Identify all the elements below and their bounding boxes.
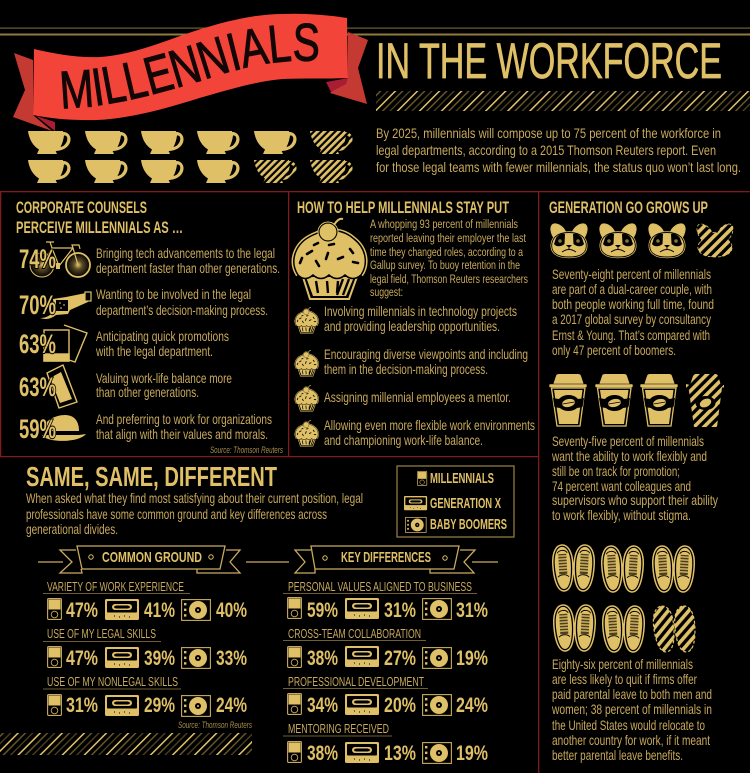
row: use of my nonlegal skills: 31% [66, 694, 98, 717]
panel: generation go grows up [549, 199, 733, 763]
row: professional development: 34% [307, 694, 338, 717]
intro paragraph: suggest: [370, 285, 403, 299]
stat: 59%: 59% [19, 414, 56, 444]
row: professional development: PROFESSIONAL DEVELOPMENT [288, 674, 424, 689]
suggestion 4: and championing work-life balance. [324, 432, 483, 448]
intro text: generational divides. [26, 521, 118, 537]
text: promotions: Anticipating quick promotions [96, 328, 229, 344]
heading [16, 199, 183, 237]
icon: large cupcake [294, 219, 365, 299]
row: personal values: 31% [456, 599, 488, 622]
row: cross-team collaboration: 38% [307, 647, 338, 670]
icon row: coffee to-go cups [549, 374, 724, 427]
stat: 74%: 74% [19, 244, 56, 274]
row: personal values: 59% [307, 599, 338, 622]
text: parental leave: are less likely to quit if firms offer [552, 671, 697, 687]
suggestion 2: them in the decision-making process. [324, 361, 488, 377]
row: variety of work experience [43, 579, 247, 622]
ribbon: key differences [295, 546, 498, 573]
icon: phone [47, 365, 77, 408]
row: cross-team collaboration: 19% [456, 647, 488, 670]
legend [397, 466, 514, 537]
row: use of my nonlegal skills: 24% [216, 694, 247, 717]
banner right tail [330, 32, 368, 104]
icon: small cupcake 4 [295, 421, 318, 446]
icon: small cupcake 3 [295, 386, 318, 411]
hatched band: header [376, 91, 750, 111]
row: variety of work experience: 47% [66, 599, 98, 622]
row: variety of work experience: 41% [144, 599, 175, 622]
suggestion 2 [324, 346, 528, 377]
suggestion 4: Allowing even more flexible work environments [324, 417, 535, 433]
title banner: Millennials [13, 14, 368, 131]
text: parental leave: Eighty-six percent of millennials [552, 656, 693, 672]
row: mentoring received: 19% [456, 742, 488, 765]
ribbon: key differences: KEY DIFFERENCES [341, 549, 431, 566]
banner curve for title [61, 61, 325, 108]
row: cross-team collaboration [283, 626, 488, 670]
text: tech: department faster than other generations. [96, 260, 280, 276]
row: mentoring received: 13% [384, 742, 416, 765]
row: use of my nonlegal skills [43, 674, 247, 717]
text: dual career [552, 266, 714, 358]
text: decision making: Wanting to be involved in the legal [96, 286, 251, 302]
row: professional development: 24% [456, 694, 488, 717]
icon: small cupcake 1 [295, 308, 318, 333]
row: professional development [283, 674, 488, 717]
banner main ribbon [33, 14, 348, 120]
text: values: that align with their values and morals. [96, 426, 268, 442]
intro text [26, 490, 363, 537]
text: values: And preferring to work for organizations [96, 411, 272, 427]
icon: bowler hat [42, 415, 86, 441]
row: mentoring received [283, 721, 488, 765]
stat: 70%: 70% [19, 290, 56, 320]
panel: corporate counsels [16, 199, 283, 456]
text: work-life: Valuing work-life balance more [96, 370, 232, 386]
row: use of my legal skills: 33% [216, 647, 247, 670]
row: professional development: 20% [384, 694, 416, 717]
icon row: ten coffee cups, 75 percent [28, 131, 353, 183]
row: mentoring received: 38% [307, 742, 338, 765]
banner title: MILLENNIALS [61, 23, 318, 109]
row: personal values [283, 579, 488, 622]
heading: PERCEIVE MILLENNIALS AS … [16, 219, 183, 237]
suggestion 1: Involving millennials in technology projects [324, 303, 517, 319]
icon rows: shoes [552, 545, 697, 653]
row: use of my legal skills: 39% [144, 647, 175, 670]
text: flexibility: 74 percent want colleagues and [552, 478, 691, 494]
suggestion 4 [324, 417, 535, 448]
text: values [96, 411, 272, 442]
intro text: When asked what they find most satisfying about their current position, legal [26, 490, 363, 506]
text: dual career: only 47 percent of boomers. [552, 342, 676, 358]
text: parental leave: better parental leave benefits. [552, 747, 683, 763]
intro paragraph: Gallup survey. To buoy retention in the [370, 258, 520, 272]
stat: 63% work-life: 63% [19, 372, 56, 402]
banner folds [36, 78, 348, 131]
text: promotions: with the legal department. [95, 343, 213, 359]
row: personal values: 31% [384, 599, 416, 622]
text: work-life: than other generations. [96, 384, 199, 400]
text: flexibility: to work flexibly, without stigma. [552, 507, 691, 523]
row: use of my legal skills [43, 626, 247, 670]
legend: baby boomers: BABY BOOMERS [430, 516, 507, 533]
text: promotions [95, 328, 229, 359]
intro paragraph: legal field, Thomson Reuters researchers [370, 272, 528, 286]
ribbon: common ground [38, 546, 289, 573]
intro paragraph: reported leaving their employer the last [370, 231, 526, 245]
panel: same, same, different [0, 461, 514, 765]
text: flexibility: still be on track for promotion; [552, 463, 680, 479]
suggestion 2: Encouraging diverse viewpoints and including [324, 346, 528, 362]
row: variety of work experience: 40% [216, 599, 247, 622]
heading: SAME, SAME, DIFFERENT [26, 461, 277, 492]
hatched band: footer [0, 733, 252, 755]
section divider lines [0, 191, 750, 773]
icon: small cupcake 2 [295, 351, 318, 376]
text: work-life [96, 370, 232, 400]
intro paragraph: A whopping 93 percent of millennials [370, 217, 518, 231]
suggestion 3: Assigning millennial employees a mentor. [324, 389, 511, 405]
row: personal values: PERSONAL VALUES ALIGNED TO BUSINESS [288, 579, 472, 594]
text: decision making: department’s decision-making process. [96, 302, 268, 318]
legend: millennials: MILLENNIALS [430, 470, 494, 487]
row: cross-team collaboration: 27% [384, 647, 416, 670]
source: Source: Thomson Reuters [210, 445, 283, 456]
icon: smartwatch [40, 292, 91, 319]
intro text [376, 125, 741, 175]
row: mentoring received: MENTORING RECEIVED [288, 721, 389, 736]
header rules [0, 28, 750, 36]
text: tech: Bringing tech advancements to the legal [96, 245, 275, 261]
row: use of my nonlegal skills: USE OF MY NONLEGAL SKILLS [47, 674, 178, 689]
text: tech [96, 245, 280, 276]
suggestion 1 [324, 303, 517, 334]
ribbon: common ground: COMMON GROUND [102, 549, 202, 566]
text: flexibility [551, 433, 718, 523]
stat: 63% promotions: 63% [19, 329, 56, 359]
text: parental leave [551, 656, 712, 763]
row: cross-team collaboration: CROSS-TEAM COLLABORATION [288, 626, 421, 641]
legend: generation x: GENERATION X [430, 495, 501, 512]
row: use of my legal skills: 47% [66, 647, 98, 670]
source: Source: Thomson Reuters [178, 720, 252, 731]
panel: how to help millennials stay put [294, 199, 535, 448]
suggestion 1: and providing leadership opportunities. [324, 318, 500, 334]
row: use of my nonlegal skills: 29% [144, 694, 175, 717]
text: decision making [96, 286, 268, 318]
intro text: professionals have some common ground and key differences across [26, 506, 327, 522]
heading: CORPORATE COUNSELS [16, 199, 147, 217]
icon: photos [44, 325, 87, 362]
icon: bicycle [30, 242, 90, 277]
heading: HOW TO HELP MILLENNIALS STAY PUT [297, 199, 509, 217]
intro paragraph [370, 217, 528, 299]
intro paragraph: time they changed roles, according to a [370, 245, 523, 259]
banner left tail [13, 53, 52, 131]
row: use of my legal skills: USE OF MY LEGAL SKILLS [47, 626, 156, 641]
icon row: dogs [551, 224, 733, 257]
row: variety of work experience: VARIETY OF WORK EXPERIENCE [47, 579, 184, 594]
